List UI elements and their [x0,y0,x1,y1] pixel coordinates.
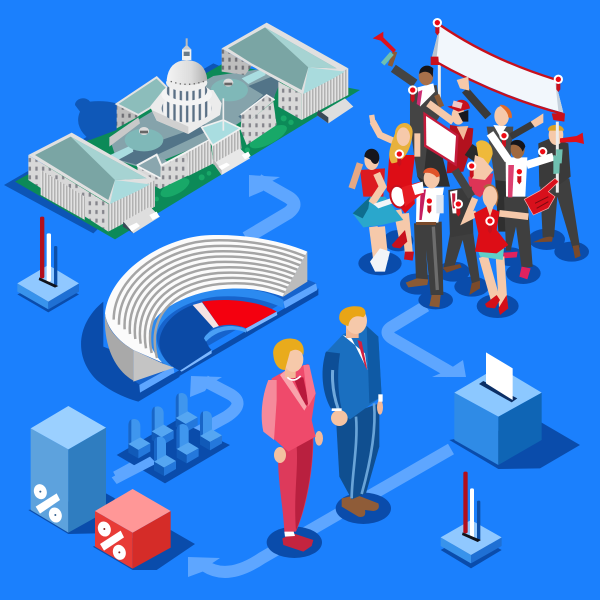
dome [150,38,222,134]
ballot paper [486,352,513,400]
senate chamber [81,235,318,402]
arrow: seats to chamber [116,376,238,477]
seating rows [105,235,307,382]
central roof [109,68,279,168]
arrow: ballot line to percentage boxes [188,449,451,577]
capitol building [4,23,360,239]
protest sign [423,112,459,167]
person: man in dark suit [443,170,480,295]
person: blond man with vuvuzela [533,122,584,258]
person: woman in red dress [467,184,528,315]
left wing [28,133,160,233]
person: man in white shirt with foam hand [490,133,560,279]
back left stub [117,104,138,128]
arrow: crowd to ballot box [388,306,466,377]
crowd ground shadows [358,229,589,318]
bar chart right [441,472,502,568]
person: woman with black hair and teal skirt [352,149,403,272]
percentage boxes [28,406,195,570]
bar chart left [17,217,79,312]
flagpole [221,98,226,131]
floor vote sectors [159,305,213,371]
tall blue box [28,406,115,534]
right wing [222,23,353,123]
inner ring [149,288,283,368]
banner poles [435,63,444,113]
red box [93,489,195,570]
arrow: capitol to chamber [246,175,294,238]
man candidate [323,306,391,524]
lawns [154,115,294,201]
seats [112,393,230,484]
person: woman with red cap [428,100,473,173]
crowd [352,18,589,318]
banner [431,18,565,122]
person: woman with long blonde hair [372,115,417,261]
ballot box [449,352,580,469]
center portico [212,128,242,165]
center front wing [137,155,167,178]
small dome right [211,79,248,101]
person: man in white shirt with megaphone [373,168,444,307]
person: man with raised arms [457,77,543,232]
person: woman with blonde hair seen from side [465,140,493,197]
woman candidate [262,339,323,558]
small dome left [125,127,163,151]
person: man with vuvuzela [373,32,450,187]
